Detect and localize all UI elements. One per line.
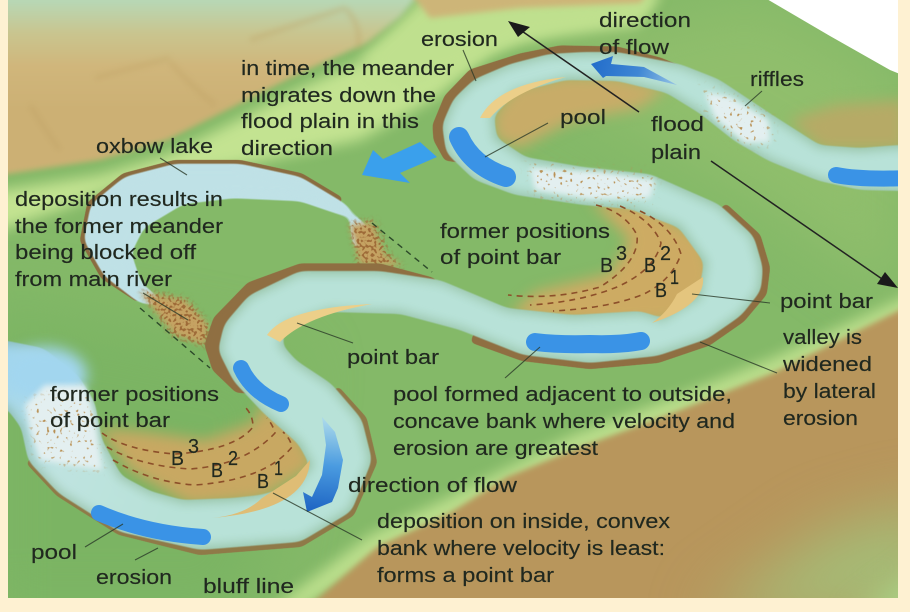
river colour variations [3,347,87,403]
label: erosion (bottom): erosion [96,566,172,589]
label: deposition blocks meander: being blocked off [15,241,196,264]
upper right sediment patch [790,100,905,150]
label: valley widened: erosion [783,407,858,430]
label: flood plain [651,113,704,164]
label: point bar (centre): point bar [347,346,439,369]
label: oxbow lake: oxbow lake [96,135,213,158]
labels: B positions (left): 3 [188,435,199,458]
label: former positions of point bar (left): of point bar [50,409,170,432]
oxbow outer bank [85,165,340,298]
label: pool formed: erosion are greatest [393,437,598,460]
labels: B positions (left): 1 [274,457,283,480]
label: deposition blocks meander [15,188,223,291]
bluff dashed lines [140,223,432,368]
labels: B positions (right): B [600,254,613,277]
eroding outer banks [30,46,764,550]
label: erosion (top): erosion [421,28,498,51]
leader lines [85,50,777,560]
label: former positions of point bar (left) [50,383,219,432]
label: deposition on inside: deposition on inside, convex [377,510,671,533]
oxbow lake [85,165,405,347]
labels: B positions (right): 1 [670,266,679,289]
label: deposition blocks meander: deposition results in [15,188,223,211]
arrow: lower direction of flow [303,417,343,512]
label: pool formed: concave bank where velocity and [393,410,735,433]
labels: B positions (left) [171,435,283,493]
former point bar positions: dashed arcs right [508,205,681,311]
label: deposition blocks meander: the former meander [15,215,223,238]
label: pool formed [393,383,735,460]
label: deposition on inside [377,510,671,587]
label: flood plain: plain [651,141,701,164]
label: valley widened: widened [782,353,872,376]
inner bend sediment areas [98,75,715,505]
arrow: meander migration [362,142,437,183]
label: former positions of point bar (right) [440,220,610,269]
label: pool formed: pool formed adjacent to outside, [393,383,732,406]
label: meander migration text: direction [241,137,333,160]
riffles: left [25,385,102,470]
label: riffles: riffles [750,68,804,91]
label: former positions of point bar (right): of point bar [440,246,561,269]
label: direction of flow (bottom): direction of flow [348,474,517,497]
label: of flow (top): of flow [599,36,669,59]
label: former positions of point bar (right): former positions [440,220,610,243]
label: former positions of point bar (left): former positions [50,383,219,406]
pools [99,137,910,537]
label: bluff line: bluff line [203,575,294,598]
labels: B positions (left): B [257,470,269,493]
label: deposition blocks meander: from main river [15,268,172,291]
labels: B positions (right): 3 [616,242,627,265]
terrain: lower valley side [314,308,898,598]
labels: B positions (right) [600,242,679,302]
terrain: upper valley side [0,0,660,180]
riffles: upper [700,86,772,145]
label: valley widened: valley is [783,326,862,349]
label: meander migration text [241,57,454,160]
labels: B positions (right): 2 [660,242,671,265]
label: meander migration text: migrates down the [241,84,436,107]
white corner [768,0,898,74]
labels: B positions (left): B [211,459,223,482]
arrow: flood plain extent down [711,161,898,288]
labels: B positions (left): 2 [228,447,238,470]
label: deposition on inside: bank where velocity is least: [377,537,665,560]
label: direction of flow (top): direction [599,9,691,32]
labels: B positions (right): B [655,279,667,302]
former point bar positions: dashed arcs left [102,407,292,485]
sediment plug: oxbow right end [350,220,405,268]
point bars in the channel [212,77,703,518]
label: valley widened: by lateral [783,380,876,403]
arrow: flood plain extent up [508,21,639,112]
label: flood plain: flood [651,113,704,136]
label: deposition on inside: forms a point bar [377,564,554,587]
labels: B positions (left): B [171,447,184,470]
riffles: middle [528,162,655,204]
label: meander migration text: flood plain in this [241,110,419,133]
label: valley widened [782,326,876,430]
label: meander migration text: in time, the meander [241,57,454,80]
label: pool (bottom): pool [31,541,77,564]
label: pool (top): pool [560,106,606,129]
oxbow water [85,165,376,305]
label: point bar (right): point bar [780,290,873,313]
labels: B positions (right): B [644,254,656,277]
sediment plug: oxbow lower end [140,290,210,347]
arrow: upper direction of flow [591,56,677,85]
